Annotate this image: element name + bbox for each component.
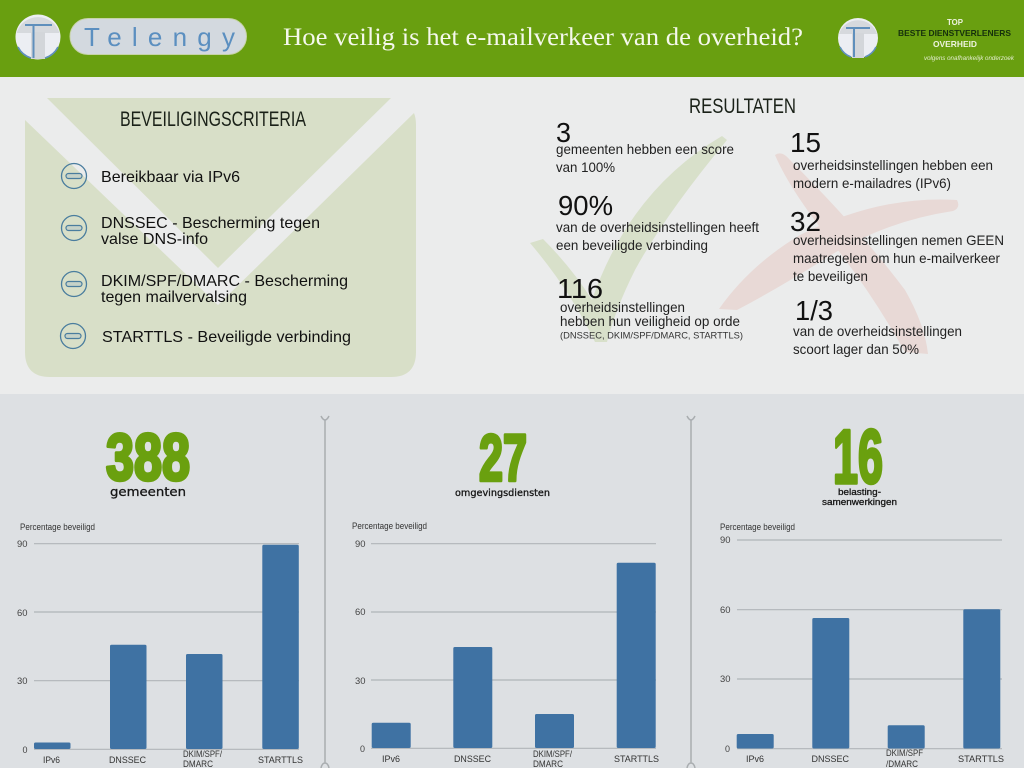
award text [898,18,1015,62]
result: 116: (DNSSEC, DKIM/SPF/DMARC, STARTTLS) [560,330,743,342]
bar chart: gemeenten: 30 [17,676,28,687]
bar chart: belastingsamenwerkingen: IPv6 [746,754,764,765]
title: Hoe veilig is het e-mailverkeer van de overheid? [283,24,803,51]
icon: check mark watermark [530,136,727,342]
result: 32 [790,206,1004,284]
stat label: omgevingsdiensten: omgevingsdiensten [455,488,550,499]
result: 90% [556,190,759,253]
stat: 16: 16 [833,415,883,500]
result: 15: overheidsinstellingen hebben een [793,157,993,173]
stat label: belasting-samenwerkingen [822,487,897,507]
result: 1/3: scoort lager dan 50% [793,341,919,357]
bar chart: belastingsamenwerkingen: 60 [720,605,730,616]
bar chart: gemeenten: DNSSEC [109,755,146,766]
bar chart: omgevingsdiensten: STARTTLS [614,754,659,765]
bar chart: belastingsamenwerkingen: DKIM/SPF [886,748,923,759]
icon: Telengy logo circle [16,14,60,60]
bar chart: gemeenten: Percentage beveiligd [20,522,95,532]
result: 3 gemeenten: 3 [556,117,571,148]
stat label: belasting-samenwerkingen: belasting- [838,487,881,497]
bar chart: omgevingsdiensten: 90 [355,539,366,550]
result: 15: modern e-mailadres (IPv6) [793,175,951,191]
bar chart: belastingsamenwerkingen [720,522,1004,768]
criterion: DKIM/SPF/DMARC [62,272,348,306]
result: 15 [790,127,993,191]
panel: beveiligingscriteria envelope [25,98,416,377]
criterion: DNSSEC: DNSSEC - Bescherming tegen [101,215,320,232]
panel: resultaten [530,95,1004,357]
result: 32: 32 [790,206,821,237]
bar chart: gemeenten: 0 [22,745,28,756]
award text: TOP [947,18,964,27]
result: 90%: van de overheidsinstellingen heeft [556,219,759,235]
panel: gemeenten [17,420,303,768]
criterion: STARTTLS [60,324,351,348]
criterion: STARTTLS: STARTTLS - Beveiligde verbinding [102,329,351,346]
panel: belastingsamenwerkingen [720,415,1004,768]
result: 90%: 90% [558,190,613,221]
result: 32: overheidsinstellingen nemen GEEN [793,232,1004,248]
stat label: belasting-samenwerkingen: samenwerkingen [822,497,897,507]
result: 116: overheidsinstellingen [560,299,685,315]
bar chart: belastingsamenwerkingen: 0 [725,744,730,755]
heading: resultaten: RESULTATEN [689,95,796,118]
bar chart: gemeenten: IPv6 [43,755,60,766]
icon: cross watermark [719,153,958,354]
result: 3 gemeenten: van 100% [556,159,615,175]
criterion: DNSSEC [62,215,320,248]
result: 1/3: 1/3 [795,295,833,326]
panel: upper background [0,77,1024,394]
bar chart: belastingsamenwerkingen: 90 [720,535,730,546]
heading: beveiligingscriteria: BEVEILIGINGSCRITERIA [120,108,306,131]
result: 15: 15 [790,127,821,158]
stat: 388: 388 [106,420,190,494]
result: 1/3: van de overheidsinstellingen [793,323,962,339]
divider left [321,416,329,768]
bar chart: omgevingsdiensten: 0 [360,744,365,755]
bar chart: gemeenten: 90 [17,539,28,550]
bar chart: omgevingsdiensten [352,521,659,768]
result: 116: hebben hun veiligheid op orde [560,313,740,329]
bar chart: omgevingsdiensten: DKIM/SPF/ [533,749,572,760]
envelope shape [25,98,416,377]
stat: 27: 27 [479,420,527,494]
result: 116: 116 [557,273,603,304]
bar chart: gemeenten [17,522,303,768]
result: 3 gemeenten: gemeenten hebben een score [556,141,734,157]
bar chart: gemeenten: 60 [17,608,28,619]
result: 3 gemeenten [556,117,734,175]
criterion: IPv6: Bereikbaar via IPv6 [101,169,240,186]
panel: omgevingsdiensten [352,420,659,768]
result: 90%: een beveiligde verbinding [556,237,708,253]
criterion: DKIM/SPF/DMARC: tegen mailvervalsing [101,289,247,306]
criterion: DNSSEC: valse DNS-info [101,231,208,248]
bar chart: belastingsamenwerkingen: DNSSEC [812,754,849,765]
divider right [687,416,695,768]
award text: BESTE DIENSTVERLENERS [898,28,1011,38]
award text: volgens onafhankelijk onderzoek [924,55,1015,62]
header band [0,0,1024,77]
bar chart: gemeenten: STARTTLS [258,755,303,766]
logo wordmark: Telengy: Telengy [84,22,235,52]
bar chart: belastingsamenwerkingen: Percentage beveiligd [720,522,795,532]
bar chart: belastingsamenwerkingen: 30 [720,674,730,685]
result: 116 [557,273,743,342]
result: 32: te beveiligen [793,268,868,284]
criterion: DKIM/SPF/DMARC: DKIM/SPF/DMARC - Bescherming [101,273,348,290]
criterion: IPv6 [62,164,240,188]
bar chart: belastingsamenwerkingen: STARTTLS [958,754,1004,765]
panel: lower background [0,394,1024,768]
bar chart: omgevingsdiensten: Percentage beveiligd [352,521,427,531]
bar chart: gemeenten: DKIM/SPF/ [183,749,222,760]
bar chart: omgevingsdiensten: DNSSEC [454,754,491,765]
award text: OVERHEID [933,39,977,49]
icon: second logo circle [838,18,878,58]
bar chart: omgevingsdiensten: 60 [355,607,366,618]
result: 32: maatregelen om hun e-mailverkeer [793,250,1000,266]
result: 1/3 [793,295,962,357]
bar chart: omgevingsdiensten: 30 [355,676,366,687]
bar chart: omgevingsdiensten: IPv6 [382,754,400,765]
stat label: gemeenten: gemeenten [110,484,186,499]
